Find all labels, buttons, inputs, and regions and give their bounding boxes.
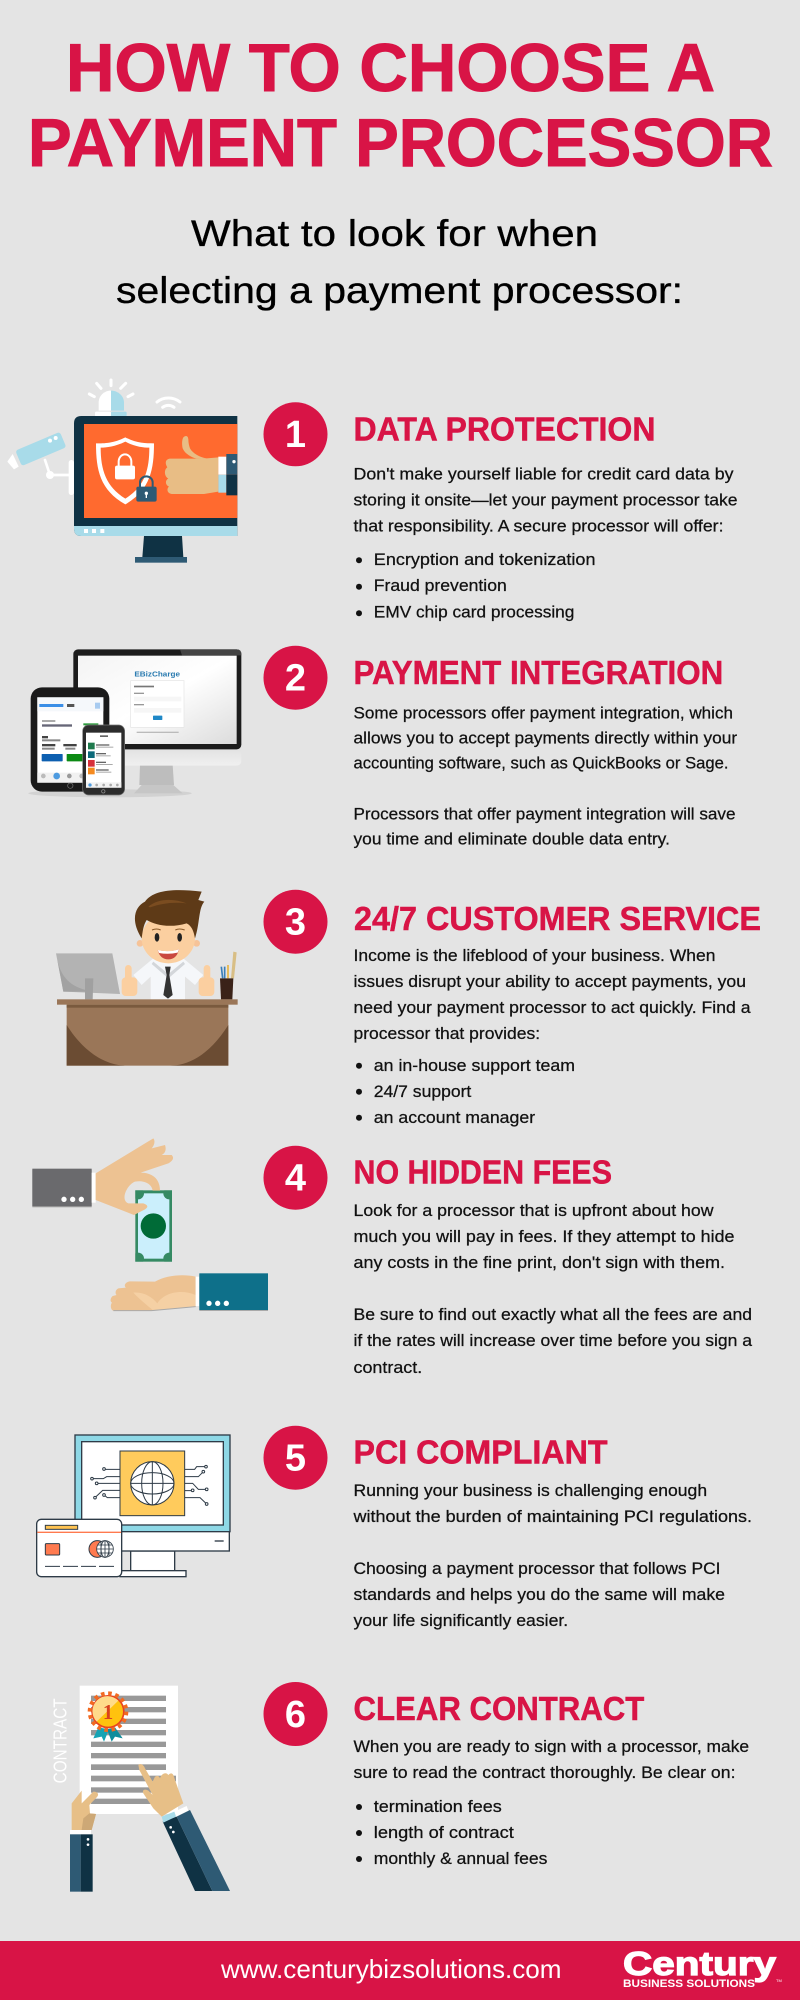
title: PAYMENT PROCESSOR [28, 105, 773, 181]
icon: PCI monitor, globe chip and credit card [37, 1435, 230, 1577]
step 4 number [264, 1146, 328, 1210]
step 2 text: Processors that offer payment integration will save [354, 805, 736, 823]
step 5 text: your life significantly easier. [354, 1612, 568, 1630]
step 4 text: if the rates will increase over time before you sign a [354, 1332, 753, 1350]
step 4 text [354, 1202, 753, 1377]
step 3 bullets: an in-house support team [374, 1057, 575, 1075]
step 3 text: need your payment processor to act quickly. Find a [354, 999, 751, 1017]
step 2 text: accounting software, such as QuickBooks or Sage. [354, 754, 728, 772]
step 3 text [354, 947, 751, 1043]
step 6 text [354, 1738, 749, 1782]
subtitle [116, 213, 683, 311]
century logo: BUSINESS SOLUTIONS [623, 1978, 755, 1990]
step 3 bullets [356, 1057, 575, 1127]
step 6 heading: CLEAR CONTRACT [354, 1690, 644, 1727]
icon: BizCharge desktop, tablet and phone: EBizCharge [134, 670, 180, 679]
step 6 bullets: length of contract [374, 1824, 514, 1842]
step 5 text: Running your business is challenging enough [354, 1482, 707, 1500]
icon: contract with medal and hands: 1 [103, 1702, 113, 1724]
step 6 text: When you are ready to sign with a processor, make [354, 1738, 749, 1756]
step 5 text: standards and helps you do the same will make [354, 1586, 725, 1604]
step 3 text: processor that provides: [354, 1025, 540, 1043]
step 4 text: Be sure to find out exactly what all the fees are and [354, 1306, 752, 1324]
step 4 heading: NO HIDDEN FEES [354, 1154, 612, 1191]
step 5 text: without the burden of maintaining PCI regulations. [352, 1508, 752, 1526]
icon: hands exchanging money [32, 1138, 268, 1311]
step 3 text: issues disrupt your ability to accept payments, you [354, 973, 746, 991]
century logo: TM [776, 1978, 782, 1983]
step 4 text: contract. [354, 1359, 422, 1377]
step 5 heading: PCI COMPLIANT [354, 1434, 608, 1471]
step 2 number [264, 646, 328, 710]
step 1 text [354, 465, 738, 535]
step 1 text: Don't make yourself liable for credit card data by [354, 465, 734, 483]
website url: www.centurybizsolutions.com [220, 1954, 562, 1984]
step 3 number [264, 890, 328, 954]
step 2 text: Some processors offer payment integration, which [354, 704, 733, 722]
step 3 bullets: an account manager [374, 1109, 536, 1127]
title [28, 30, 773, 181]
step 2 number: 2 [285, 658, 306, 700]
step 6 number: 6 [285, 1694, 306, 1736]
step 1 bullets: Fraud prevention [374, 577, 507, 595]
step 1 bullets: Encryption and tokenization [374, 551, 596, 569]
step 4 text: any costs in the fine print, don't sign with them. [354, 1254, 725, 1272]
icon: monitor with security shield and thumbs up [7, 380, 237, 563]
icon: contract with medal and hands: CONTRACT [50, 1698, 71, 1783]
step 5 text: Choosing a payment processor that follows PCI [354, 1560, 720, 1578]
step 3 bullets: 24/7 support [374, 1083, 472, 1101]
step 4 number: 4 [285, 1158, 306, 1200]
subtitle: What to look for when [191, 213, 598, 254]
step 3 text: Income is the lifeblood of your business. When [354, 947, 716, 965]
step 6 bullets: monthly & annual fees [374, 1850, 547, 1868]
step 1 text: that responsibility. A secure processor will offer: [354, 517, 724, 535]
century logo: Century [623, 1945, 777, 1982]
step 3 number: 3 [285, 902, 306, 944]
step 4 text: Look for a processor that is upfront about how [354, 1202, 714, 1220]
step 1 number [264, 402, 328, 466]
icon: BizCharge desktop, tablet and phone [28, 649, 241, 797]
step 1 bullets: EMV chip card processing [374, 604, 574, 622]
step 2 heading: PAYMENT INTEGRATION [354, 654, 723, 691]
step 6 bullets: termination fees [374, 1798, 502, 1816]
step 6 bullets [356, 1798, 547, 1868]
icon: contract with medal and hands [50, 1686, 230, 1892]
step 1 number: 1 [285, 414, 306, 456]
step 2 text: allows you to accept payments directly within your [354, 729, 738, 747]
step 2 text [354, 704, 738, 848]
step 5 number: 5 [285, 1438, 306, 1480]
step 2 text: you time and eliminate double data entry. [354, 830, 670, 848]
step 1 text: storing it onsite—let your payment processor take [354, 491, 738, 509]
century logo [623, 1945, 782, 1990]
step 5 text [352, 1482, 752, 1630]
step 1 bullets [356, 551, 596, 622]
step 6 text: sure to read the contract thoroughly. Be clear on: [354, 1764, 736, 1782]
step 6 number [264, 1682, 328, 1746]
subtitle: selecting a payment processor: [116, 270, 683, 311]
title: HOW TO CHOOSE A [66, 30, 715, 106]
step 5 number [264, 1426, 328, 1490]
icon: support agent at desk [56, 890, 238, 1066]
step 4 text: much you will pay in fees. If they attempt to hide [354, 1228, 734, 1246]
step 1 heading: DATA PROTECTION [354, 411, 656, 448]
footer bar [0, 1941, 800, 2000]
step 3 heading: 24/7 CUSTOMER SERVICE [354, 900, 761, 937]
